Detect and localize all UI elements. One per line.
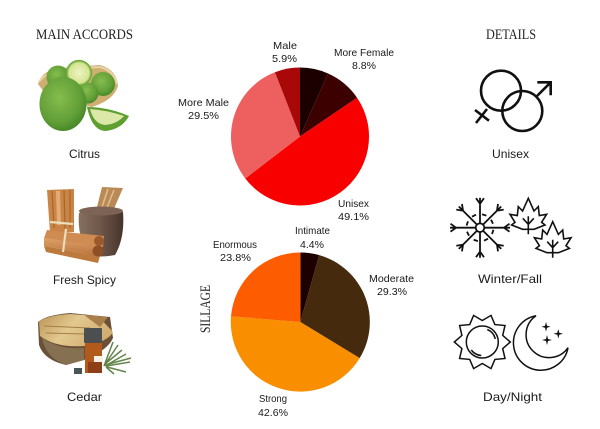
label: more male: 29.5% <box>188 110 219 122</box>
label: more male <box>178 97 229 122</box>
slice: enormous <box>231 252 300 322</box>
icon: snowflake <box>450 198 510 258</box>
slice: unisex <box>245 98 369 206</box>
icon: bergamot in basket <box>38 60 129 131</box>
label: unisex: Unisex <box>338 198 370 210</box>
label: day/night: Day/Night <box>483 390 543 404</box>
label: more female: 8.8% <box>352 60 376 72</box>
slice: more male <box>231 72 300 178</box>
chart: sillage pie <box>213 225 414 419</box>
label: strong: 42.6% <box>258 407 288 419</box>
label: more female <box>334 47 394 72</box>
label: moderate: 29.3% <box>377 286 407 298</box>
icon: sun <box>454 315 510 369</box>
label: strong <box>258 393 288 419</box>
chart: gender pie <box>178 40 394 223</box>
icon: maple leaf lower <box>534 222 571 258</box>
label: strong: Strong <box>259 393 287 405</box>
label: enormous: 23.8% <box>220 252 251 264</box>
slice: female <box>300 68 328 136</box>
panel: day/night detail <box>454 315 568 404</box>
label: winter/fall: Winter/Fall <box>478 272 542 286</box>
slice: intimate <box>300 252 319 322</box>
label: unisex: Unisex <box>492 147 529 161</box>
slice: strong <box>231 316 360 392</box>
label: intimate: Intimate <box>295 225 330 237</box>
label: moderate <box>369 273 414 298</box>
label: citrus: Citrus <box>69 147 100 161</box>
icon: gender symbols <box>475 71 551 131</box>
label: moderate: Moderate <box>369 273 414 285</box>
icon: cinnamon sticks and pot <box>44 187 123 263</box>
label: fresh spicy: Fresh Spicy <box>53 273 116 287</box>
slice: moderate <box>300 255 370 358</box>
heading: details: DETAILS <box>486 27 536 43</box>
panel: unisex detail <box>475 71 551 161</box>
heading: main accords: MAIN ACCORDS <box>36 27 133 43</box>
label: unisex <box>338 198 370 223</box>
label: male <box>272 40 297 65</box>
icon: cedar log with bottle <box>38 313 131 374</box>
label: male: Male <box>273 40 297 52</box>
label: more female: More Female <box>334 47 394 59</box>
label: unisex: 49.1% <box>338 211 369 223</box>
label: intimate: 4.4% <box>300 239 324 251</box>
slice: more female <box>300 73 357 136</box>
label: enormous: Enormous <box>213 239 257 251</box>
label: more male: More Male <box>178 97 229 109</box>
label: enormous <box>213 239 257 264</box>
panel: winter/fall detail <box>450 198 571 286</box>
slice: male <box>275 67 300 136</box>
icon: maple leaf upper <box>510 198 547 234</box>
heading: sillage: SILLAGE <box>198 285 214 333</box>
icon: stars <box>542 322 563 345</box>
label: male: 5.9% <box>272 53 297 65</box>
panel: citrus accord <box>38 60 129 161</box>
label: intimate <box>295 225 330 251</box>
panel: cedar accord <box>38 313 131 404</box>
panel: fresh spicy accord <box>44 187 123 287</box>
icon: crescent moon <box>513 316 568 370</box>
label: cedar: Cedar <box>67 390 102 404</box>
